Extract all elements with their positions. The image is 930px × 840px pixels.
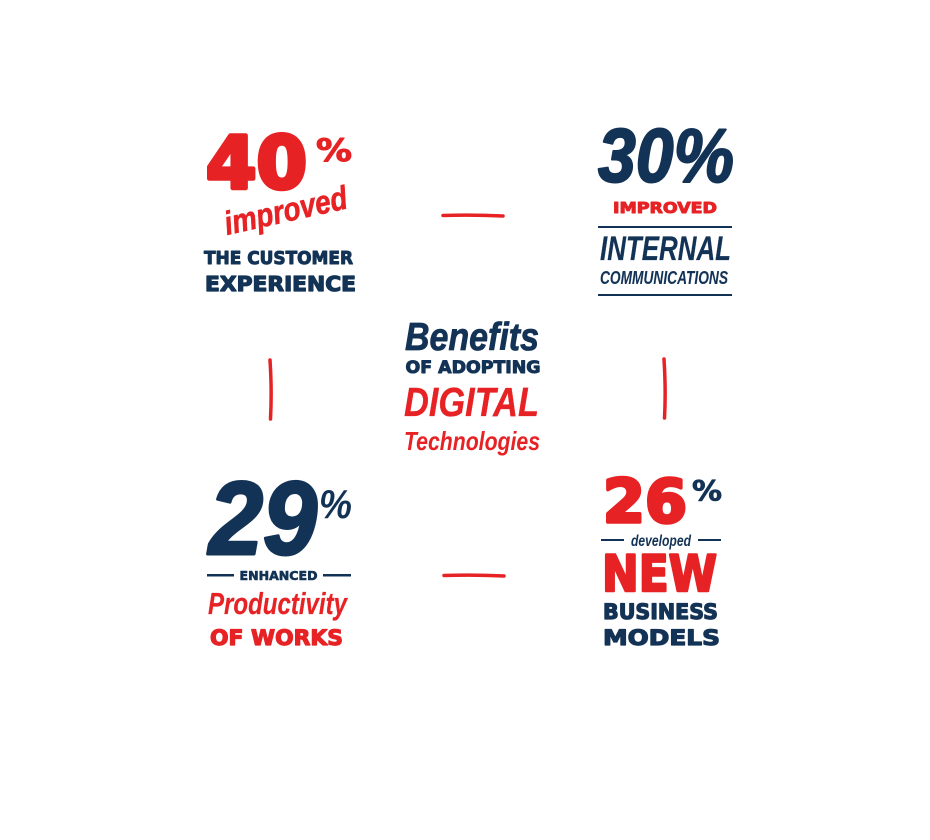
label: productivity: Productivity — [208, 586, 348, 621]
label: enhanced: ENHANCED — [240, 569, 318, 583]
label: experience: EXPERIENCE — [205, 272, 356, 296]
rule — [207, 574, 234, 576]
stat: 26: 26 — [603, 467, 687, 537]
rule — [323, 574, 351, 576]
label: communications: COMMUNICATIONS — [600, 267, 728, 288]
rule — [598, 226, 732, 228]
stat: percent sign: % — [319, 481, 352, 527]
label: of works: OF WORKS — [210, 626, 343, 650]
rule — [601, 539, 624, 541]
rule — [598, 294, 732, 296]
stat: 40%: % — [316, 133, 352, 169]
stat: 29: 29 — [207, 461, 317, 577]
panel: central title — [404, 316, 540, 456]
panel: 29% enhanced productivity of works — [207, 461, 352, 650]
label: developed: developed — [631, 533, 692, 550]
connector: right — [664, 359, 665, 418]
stat: 30%: 30% — [598, 114, 734, 199]
label: business: BUSINESS — [603, 600, 718, 624]
title: benefits: Benefits — [405, 316, 539, 359]
connector: bottom — [444, 573, 504, 578]
connector: left — [270, 360, 271, 419]
stat: percent sign: % — [692, 474, 722, 507]
label: internal: INTERNAL — [600, 230, 731, 268]
rule — [698, 539, 721, 541]
panel: 40% improved the customer experience — [204, 121, 356, 296]
panel: 26% developed new business models — [601, 467, 722, 650]
title: of adopting: OF ADOPTING — [406, 358, 540, 378]
panel: 30% improved internal communications — [598, 114, 734, 296]
stat: 40% — [206, 121, 352, 205]
stat: 40%: 40 — [206, 121, 307, 205]
title: technologies: Technologies — [404, 426, 540, 456]
label: improved: IMPROVED — [613, 199, 717, 217]
label: the customer: THE CUSTOMER — [204, 249, 354, 269]
label: new: NEW — [602, 545, 717, 603]
connector: top — [443, 213, 503, 218]
label: models: MODELS — [603, 626, 720, 650]
label: improved: improved — [221, 179, 351, 242]
title: digital: DIGITAL — [404, 379, 539, 425]
